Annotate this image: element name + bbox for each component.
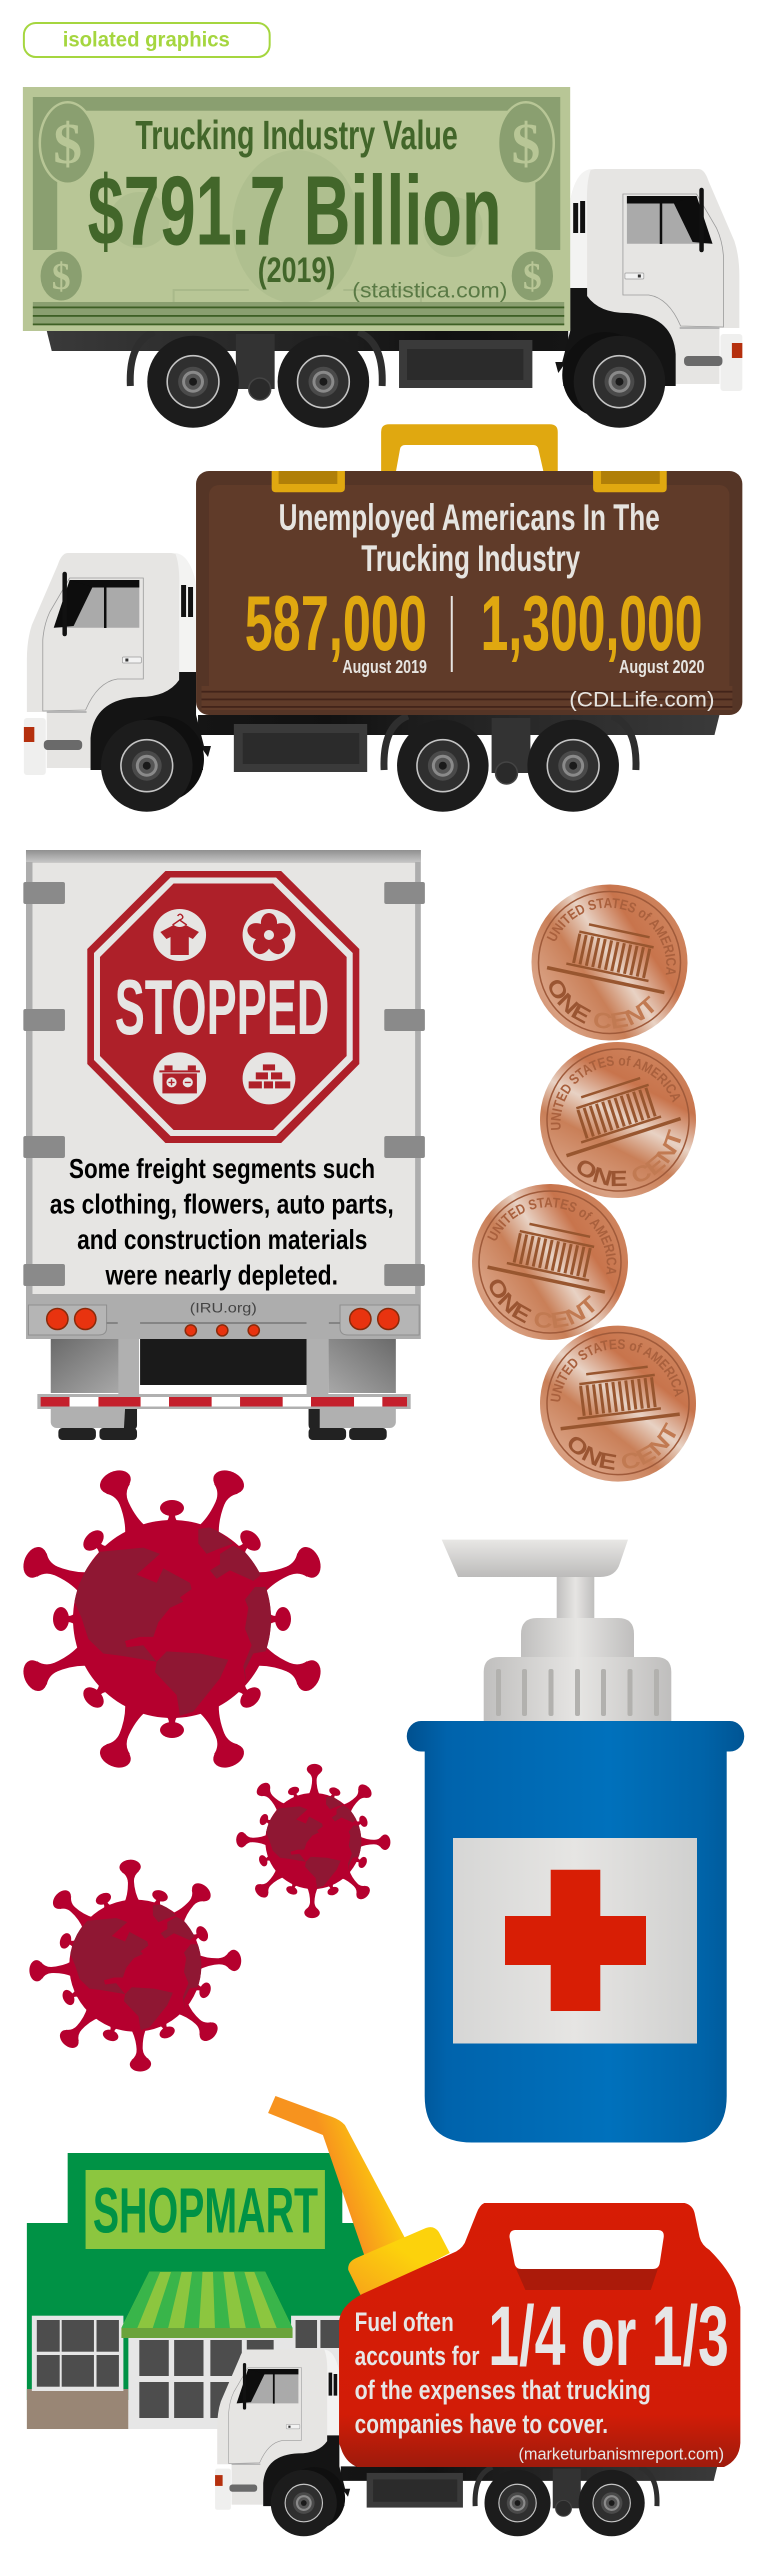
stat date 2019: August 2019 xyxy=(342,656,427,677)
coin: penny 4 xyxy=(540,1326,696,1482)
source: cdllife: (CDLLife.com) xyxy=(569,689,714,712)
icon: large virus globe xyxy=(19,1466,325,1772)
coin: penny 2: UNITED STATES of AMERICA xyxy=(550,1056,680,1130)
fuel can spout xyxy=(268,2096,406,2255)
label: isolated graphics xyxy=(24,23,270,57)
source: iru.org: (IRU.org) xyxy=(190,1300,257,1316)
text block: freight segments: and construction materials xyxy=(77,1223,367,1255)
text block: freight segments: as clothing, flowers, auto parts, xyxy=(50,1188,394,1219)
shop sign: SHOPMART xyxy=(93,2175,318,2247)
icon: sanitizer pump bottle xyxy=(407,1540,744,2142)
coin: penny 1 xyxy=(532,884,688,1040)
truck 2: chassis, cab and wheels xyxy=(24,553,719,812)
coin: penny 2 xyxy=(540,1042,696,1198)
fuel text: accounts for xyxy=(355,2341,480,2371)
panel: trailer rear with stop sign xyxy=(23,850,425,1440)
icon: flower xyxy=(243,909,295,961)
coin: penny 1: UNITED STATES of AMERICA xyxy=(546,898,676,975)
fuel text: of the expenses that trucking xyxy=(355,2375,651,2405)
source: market urbanism report: (marketurbanismreport.com) xyxy=(518,2445,724,2463)
icon: car battery xyxy=(153,1052,206,1104)
stat: 791.7 billion: $791.7 Billion xyxy=(88,156,502,265)
illustration: shopmart store xyxy=(27,2153,373,2429)
reflective bumper bar xyxy=(37,1394,411,1409)
coin: penny 4: UNITED STATES of AMERICA xyxy=(550,1339,684,1402)
section: pill label and value truck xyxy=(23,23,742,428)
sign text: stopped: STOPPED xyxy=(115,964,329,1051)
section: shop, truck and fuel can xyxy=(27,2096,740,2536)
fuel text: Fuel often xyxy=(355,2307,454,2337)
icon: bricks xyxy=(243,1052,295,1104)
text block: freight segments: were nearly depleted. xyxy=(105,1259,338,1290)
coin: penny 2: ONE CENT xyxy=(577,1129,681,1186)
stat: 587,000: 587,000 xyxy=(245,581,427,667)
panel: dollar bill cargo box xyxy=(23,87,570,331)
heading second line: Trucking Industry xyxy=(361,538,580,579)
icon: t-shirt on hanger xyxy=(153,909,206,961)
heading: trucking industry value: Trucking Industry Value xyxy=(135,112,458,158)
stat year: (2019) xyxy=(258,251,335,290)
truck 3: chassis, cab and wheels xyxy=(215,2349,717,2536)
stop sign octagon xyxy=(87,871,359,1143)
panel: brown suitcase cargo box xyxy=(196,424,742,715)
truck 1: chassis, cab and wheels xyxy=(47,169,742,428)
panel: dollar bill cargo box: $ xyxy=(53,111,82,176)
coin: penny 3: ONE CENT xyxy=(490,1280,595,1328)
fuel text: companies have to cover. xyxy=(355,2409,608,2439)
icon: small virus globe xyxy=(216,1743,411,1939)
striped awning xyxy=(121,2272,293,2338)
label: isolated graphics: isolated graphics xyxy=(63,28,230,52)
coin: penny 3: UNITED STATES of AMERICA xyxy=(487,1198,616,1274)
text block: freight segments: Some freight segments such xyxy=(69,1152,375,1184)
icon: red cross xyxy=(505,1870,646,2011)
shop sign xyxy=(86,2170,325,2249)
panel: dollar bill cargo box: $ xyxy=(52,256,71,298)
illustration: red fuel can cargo box xyxy=(268,2096,740,2467)
stat date 2020: August 2020 xyxy=(619,656,705,677)
source: statistica: (statistica.com) xyxy=(352,280,508,303)
panel: dollar bill cargo box: $ xyxy=(511,111,540,176)
section: unemployment truck xyxy=(24,424,742,812)
coin: penny 1: ONE CENT xyxy=(549,980,654,1028)
text block: freight segments xyxy=(50,1152,394,1290)
coin: penny 4: ONE CENT xyxy=(568,1422,676,1470)
panel: dollar bill cargo box: $ xyxy=(523,256,542,298)
icon: medium virus globe xyxy=(5,1835,266,2096)
fuel text xyxy=(355,2289,729,2439)
coin: penny 3 xyxy=(472,1184,628,1340)
